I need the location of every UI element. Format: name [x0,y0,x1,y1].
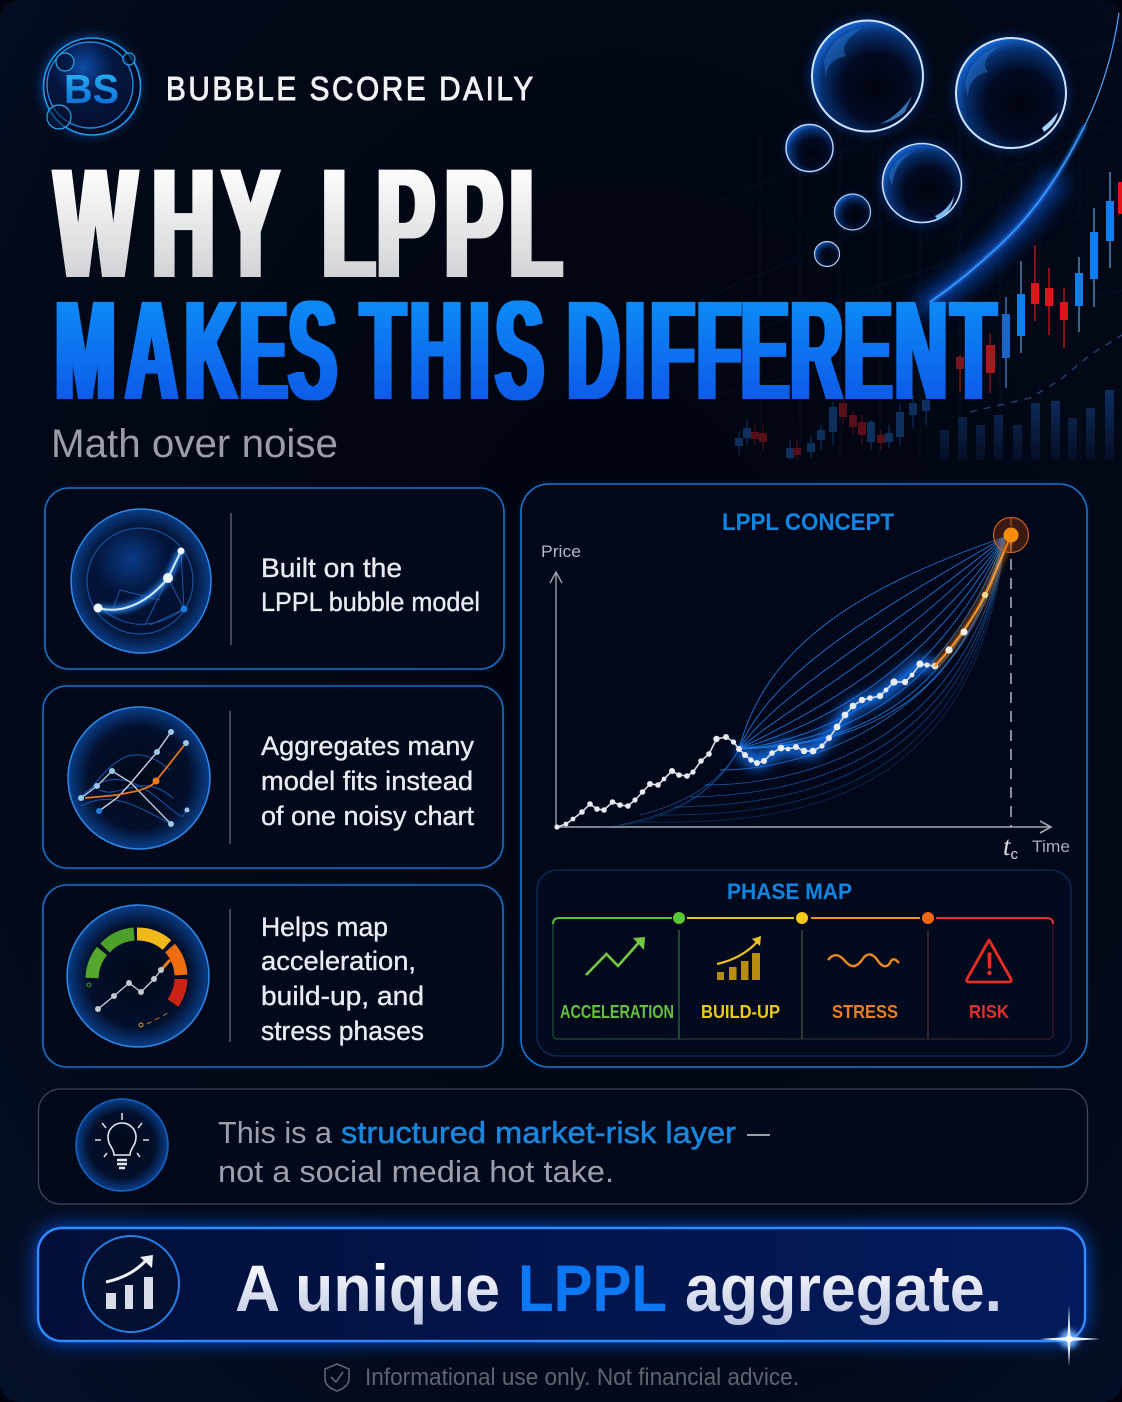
callout text: not a social media hot take. [218,1154,614,1189]
text: phases: build-up, and [261,981,424,1011]
text: aggregates: Aggregates many [261,731,475,761]
text: built on: Built on the [261,553,402,583]
bubble large left [812,20,924,132]
subtitle: Math over noise [51,422,338,466]
callout: market-risk layer [38,1089,1088,1204]
chart: LPPL price curve [541,517,1070,863]
bubble medium [882,143,962,223]
text: phases: Helps map [261,912,388,942]
banner text [235,1251,1002,1325]
axis label: critical time: c [1011,846,1019,863]
panel: built on LPPL [45,488,504,669]
callout text [218,1115,770,1189]
axis label: price: Price [541,542,581,561]
heading: phase map: PHASE MAP [727,879,852,904]
glowing curve [920,13,1119,310]
phase: acceleration [560,937,674,1022]
phase: build-up: BUILD-UP [701,1001,780,1022]
text: aggregates [261,731,475,831]
disclaimer text: Informational use only. Not financial advice. [365,1364,799,1391]
bubble small 2 [834,194,870,230]
text: built on: LPPL bubble model [261,587,480,617]
price path [557,664,935,827]
axis label: time: Time [1032,837,1070,856]
heading: LPPL concept: LPPL CONCEPT [722,509,894,536]
text: phases: acceleration, [261,946,416,976]
panel: aggregates [43,686,503,868]
icon: gauge [67,905,209,1047]
bubble tiny [814,242,840,266]
footer disclaimer [325,1364,799,1391]
logo [43,38,140,135]
critical point marker [993,517,1029,553]
bubble small 1 [786,124,834,172]
icon: network globe [71,509,211,653]
title line 1: WHY LPPL [55,135,562,313]
icon: rising bars [83,1236,179,1332]
banner text: LPPL [518,1251,667,1325]
background: market candlesticks and grid [700,40,1122,460]
sparkle [1040,1305,1100,1366]
phase timeline [553,912,1053,1039]
text: phases [261,912,424,1046]
icon: lightbulb [76,1099,168,1191]
bubble large right [956,38,1066,148]
text: phases: stress phases [261,1016,424,1046]
axis label: critical time: t [1003,831,1011,861]
logo monogram: BS [64,66,119,112]
banner text: aggregate. [685,1251,1002,1325]
bubbles [786,20,1066,266]
text: aggregates: model fits instead [261,766,473,796]
phase: acceleration: ACCELERATION [560,1001,674,1022]
text: built on [261,553,480,617]
phase: stress: STRESS [832,1001,898,1022]
phase: build-up [701,936,780,1022]
title line 2: MAKES THIS DIFFERENT [55,271,995,432]
callout text: — [747,1115,770,1150]
banner: unique LPPL aggregate [38,1228,1100,1366]
brand name: BUBBLE SCORE DAILY [166,71,533,107]
icon: shield [325,1364,349,1391]
panel: phases [43,885,503,1067]
callout text: This is a [218,1115,333,1150]
text: aggregates: of one noisy chart [261,801,474,831]
panel: phase map [537,870,1071,1056]
phase: stress [828,954,899,1022]
phase: risk [967,940,1011,1022]
critical path [935,517,1029,666]
callout text: structured market-risk layer [341,1115,736,1150]
title [55,135,995,432]
phase: risk: RISK [969,1001,1010,1022]
icon: model fits [68,707,210,849]
fan of model fits [600,537,1005,827]
banner text: A unique [235,1251,500,1325]
panel: LPPL concept [521,484,1087,1067]
